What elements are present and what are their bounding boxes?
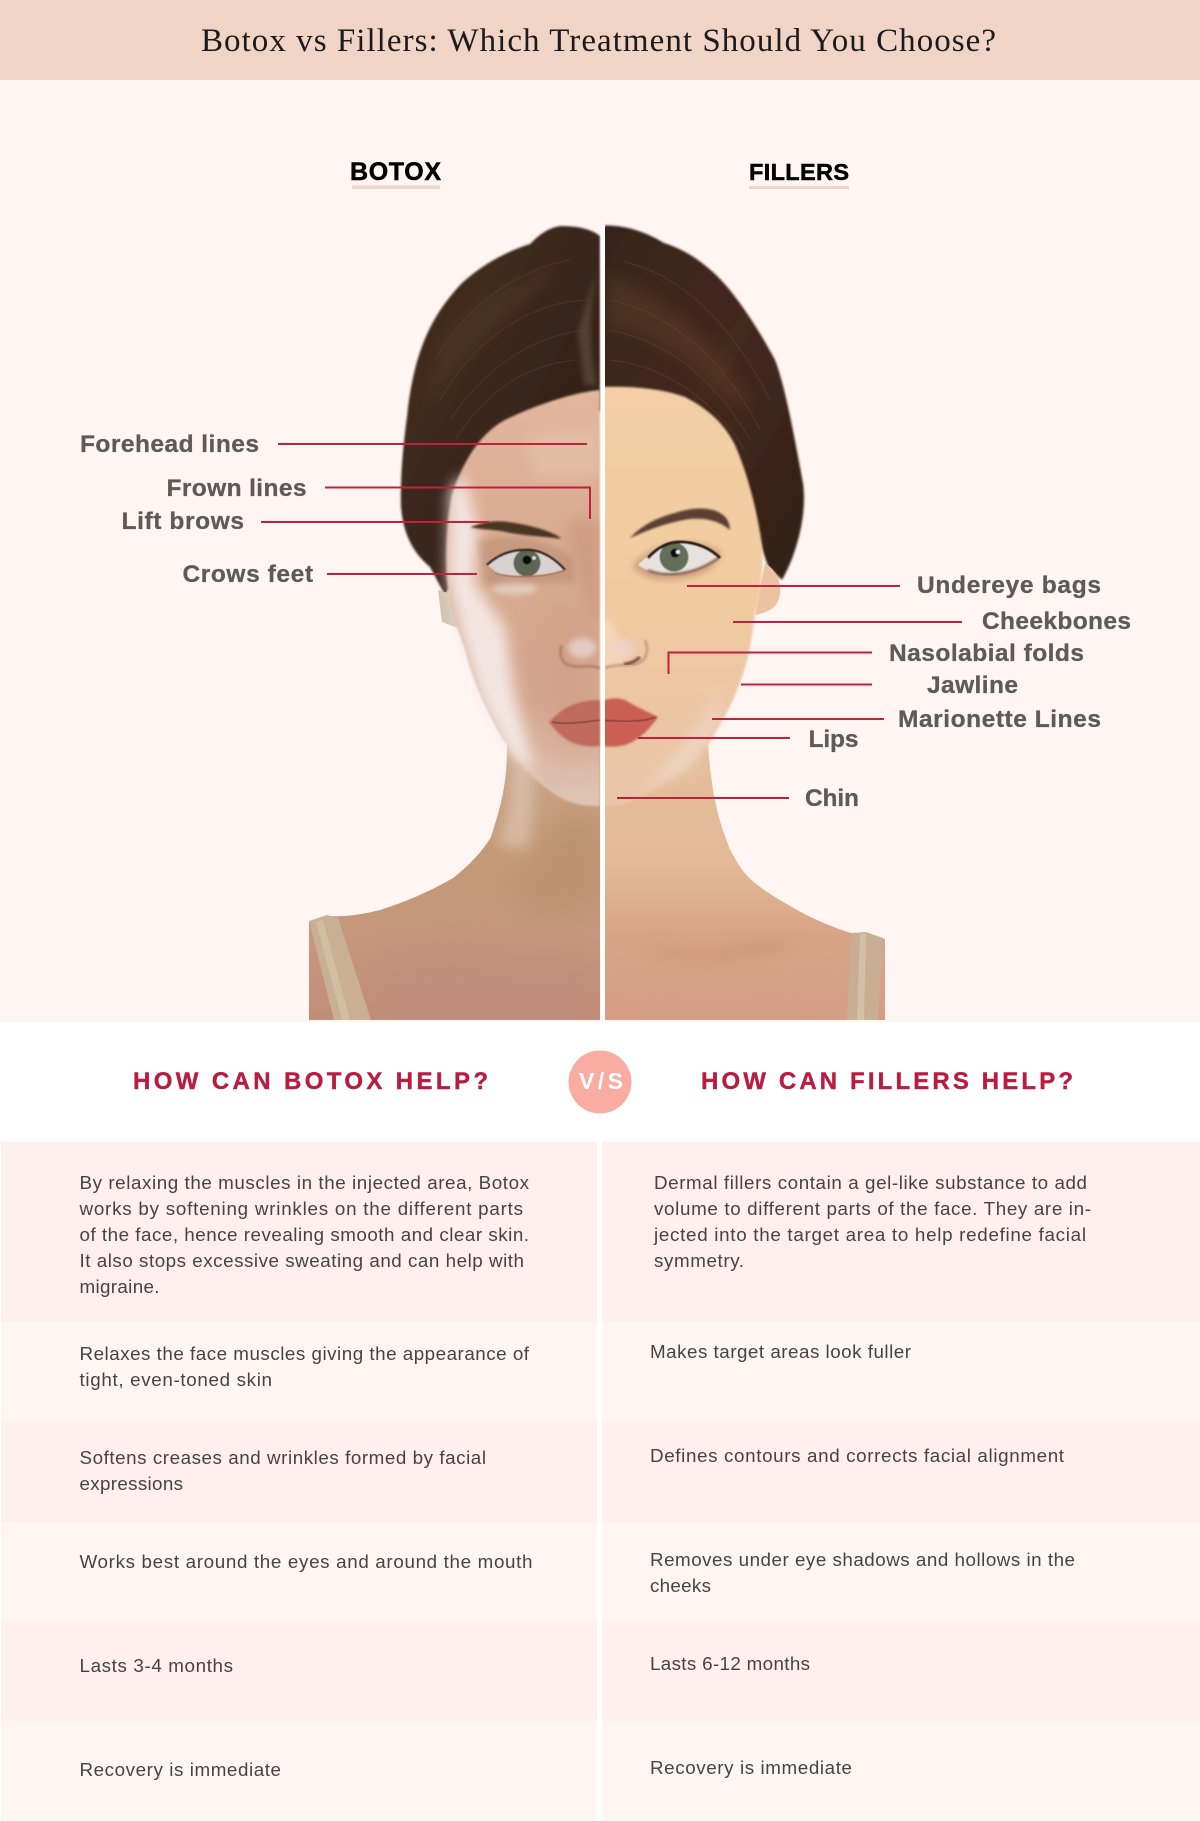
- text: fillers description: Dermal fillers contain a gel-like substance to add: [654, 1172, 1087, 1193]
- callout: cheekbones: Cheekbones: [982, 608, 1131, 635]
- panel: face comparison: [0, 80, 1200, 1022]
- icon: fillers lips: [600, 698, 658, 747]
- text: lasts 6-12 months: Lasts 6-12 months: [650, 1653, 810, 1674]
- callout: forehead lines: Forehead lines: [80, 431, 259, 458]
- text: fillers recovery: Recovery is immediate: [650, 1757, 852, 1778]
- callout: jawline: Jawline: [927, 672, 1018, 699]
- callout: crows feet: Crows feet: [182, 561, 313, 588]
- text: botox description: By relaxing the muscles in the injected area, Botox: [80, 1172, 530, 1193]
- text: softens creases: expressions: [80, 1473, 183, 1494]
- text: lasts 3-4 months: Lasts 3-4 months: [80, 1655, 233, 1676]
- text: botox description: of the face, hence revealing smooth and clear skin.: [80, 1224, 529, 1245]
- illustration: fillers half of face: [600, 226, 885, 1020]
- title: Botox vs Fillers: Which Treatment Should You Choose?: [201, 23, 996, 59]
- icon: botox lips: [549, 700, 600, 747]
- text: makes fuller: Makes target areas look fuller: [650, 1341, 911, 1362]
- callout: chin: Chin: [805, 785, 859, 812]
- text: relaxes muscles: Relaxes the face muscles giving the appearance of: [80, 1343, 530, 1364]
- illustration: botox half of face: [309, 226, 600, 1020]
- text: relaxes muscles: tight, even-toned skin: [80, 1369, 272, 1390]
- callout: lips: Lips: [808, 726, 858, 753]
- heading: botox: BOTOX: [350, 158, 441, 186]
- icon: fillers eye: [638, 542, 720, 574]
- heading: fillers: FILLERS: [749, 159, 849, 185]
- badge: v/s: [568, 1050, 632, 1114]
- callout: lift brows: Lift brows: [122, 508, 244, 535]
- text: softens creases: Softens creases and wrinkles formed by facial: [80, 1447, 486, 1468]
- text: removes shadows: cheeks: [650, 1575, 711, 1596]
- heading: how can botox help: HOW CAN BOTOX HELP?: [133, 1068, 488, 1095]
- text: botox description: It also stops excessive sweating and can help with: [80, 1250, 524, 1271]
- callout: nasolabial folds: [668, 640, 1084, 674]
- text: botox description: migraine.: [80, 1276, 160, 1297]
- header banner: [0, 0, 1200, 80]
- text: fillers description: volume to different parts of the face. They are in-: [654, 1198, 1091, 1219]
- text: fillers description: symmetry.: [654, 1250, 744, 1271]
- text: softens creases: [80, 1447, 486, 1494]
- text: relaxes muscles: [80, 1343, 530, 1390]
- icon: botox eye: [487, 550, 565, 576]
- text: botox description: [78, 1172, 530, 1297]
- panel: fillers benefits: [602, 1142, 1200, 1821]
- icon: fillers brow: [630, 509, 730, 538]
- callout: nasolabial folds: Nasolabial folds: [889, 640, 1084, 667]
- panel: botox benefits: [1, 1142, 597, 1821]
- callout: frown lines: Frown lines: [166, 475, 306, 502]
- text: works best: Works best around the eyes and around the mouth: [80, 1551, 532, 1572]
- callout: marionette lines: Marionette Lines: [898, 706, 1101, 733]
- text: botox description: works by softening wrinkles on the different parts: [78, 1198, 523, 1219]
- text: defines contours: Defines contours and corrects facial alignment: [650, 1445, 1065, 1466]
- icon: botox brow: [473, 522, 560, 538]
- callout: undereye bags: Undereye bags: [917, 572, 1101, 599]
- badge: v/s: V/S: [579, 1068, 623, 1094]
- text: botox recovery: Recovery is immediate: [80, 1759, 281, 1780]
- text: fillers description: [653, 1172, 1091, 1271]
- detail: hair strands left: [435, 260, 590, 440]
- heading: how can fillers help: HOW CAN FILLERS HELP?: [701, 1068, 1073, 1095]
- text: removes shadows: Removes under eye shadows and hollows in the: [650, 1549, 1075, 1570]
- text: fillers description: jected into the target area to help redefine facial: [653, 1224, 1086, 1245]
- detail: hair strands right: [610, 262, 770, 450]
- center divider: [600, 225, 605, 1020]
- callout: frown lines: [166, 475, 590, 519]
- text: removes shadows: [650, 1549, 1075, 1596]
